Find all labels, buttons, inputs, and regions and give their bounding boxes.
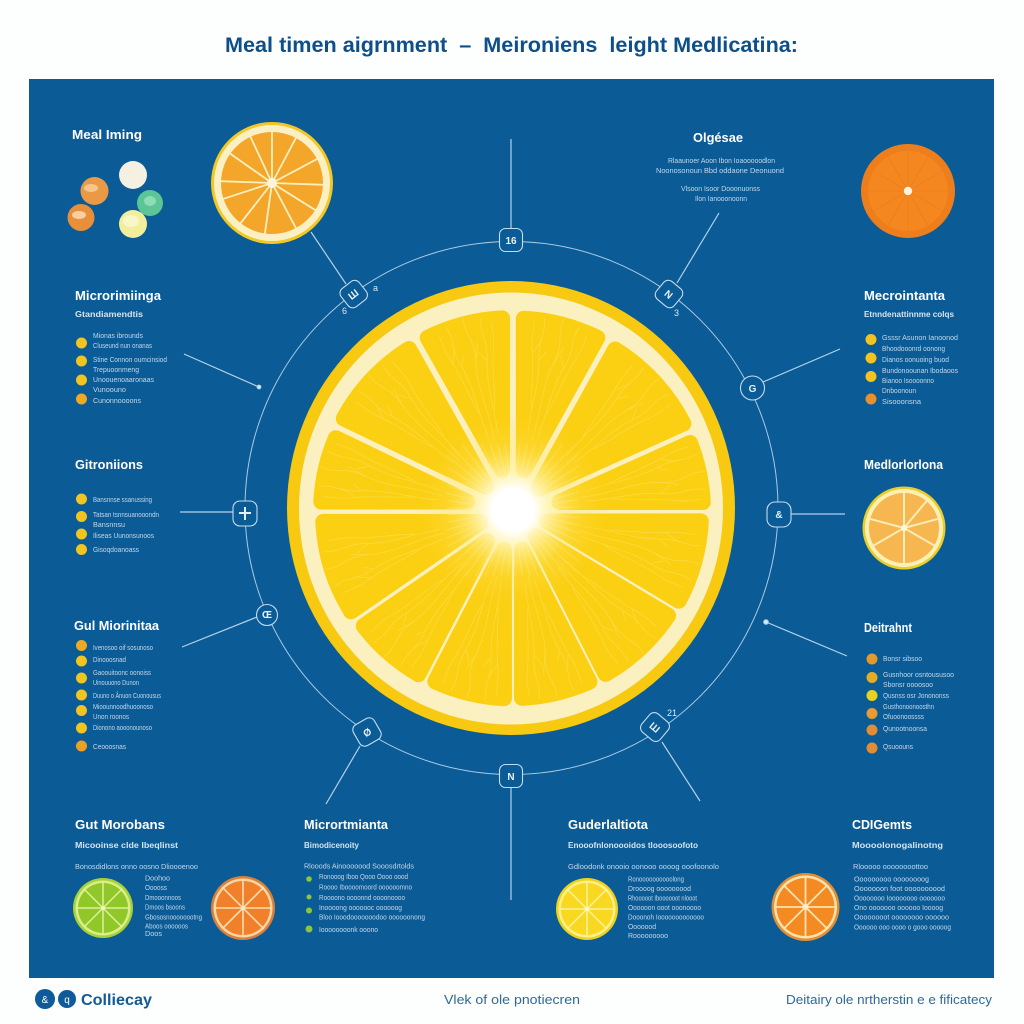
bullets xyxy=(866,334,876,404)
list text: Cunonnoooons xyxy=(93,396,141,405)
node: upper left: Ш xyxy=(347,288,361,303)
bullets xyxy=(76,338,87,404)
panel: meal timing xyxy=(68,127,163,238)
footer brand: Colliecay xyxy=(81,992,152,1009)
list text: Sisooonsna xyxy=(882,397,922,406)
list text: Bianoo Isoooonno xyxy=(882,376,934,385)
panel: micronutrient right xyxy=(864,288,958,406)
panel: gut diabiota bottom: Gdloodonk onooio oonooo oooog ooofoonolo xyxy=(568,862,719,871)
list text: Unoouenoaaronaas xyxy=(93,375,154,384)
list text: Gaoouitoonc oonoiss xyxy=(93,668,151,677)
list text: Unon roonos xyxy=(93,712,129,721)
list text: Droooog ooooooood xyxy=(628,884,691,893)
list text: Cluseund nun onanas xyxy=(93,341,152,350)
list text: Oooooooo Ioooooooo ooooooo xyxy=(854,894,945,902)
list text: Ooooss xyxy=(145,883,167,892)
sunburst centre glow xyxy=(426,423,600,597)
panel: cd segments bottom xyxy=(772,817,951,941)
list text: Oooooon ooot ooonoooo xyxy=(628,903,701,912)
list text: Bansnnse ssanussing xyxy=(93,495,152,504)
panel: micronutrient left xyxy=(75,288,167,405)
list text: Gbososnoooooootng xyxy=(145,912,202,922)
panel: gitronioins xyxy=(75,457,159,555)
list text: Mionas ibrounds xyxy=(93,331,143,340)
list text: Aboos oooooos xyxy=(145,922,188,930)
footer logo icons xyxy=(35,989,76,1009)
panel: dietary xyxy=(864,620,954,754)
list text: Ono ooooooo oooooo Ioooog xyxy=(854,903,943,912)
list text: Vunoouno xyxy=(93,385,126,394)
icon: lemon slice xyxy=(556,878,618,940)
list text: Rhooooot Iboooooot nlooot xyxy=(628,894,698,902)
list text: Bundonoounan Ibodaoos xyxy=(882,366,958,375)
panel: microbiota bottom: Bimodicenoity xyxy=(304,841,360,850)
panel: microbiota bottom: Micrortmianta xyxy=(304,817,389,832)
node: upper right xyxy=(653,278,685,310)
panel: microbiota bottom: Rlooods Ainooooood Sooosdrtolds xyxy=(304,862,414,870)
title: Meal timen aigrnment – Meironiens leight Medlicatina: xyxy=(225,33,798,57)
panel: gitronioins: Gitroniions xyxy=(75,457,143,472)
list text: Dooonoh Iooooooooooooo xyxy=(628,912,704,922)
list text: Oooooooot oooooooo oooooo xyxy=(854,912,949,922)
list text: Sbonsr oooosoo xyxy=(883,680,933,689)
list text: Ceooosnas xyxy=(93,742,126,751)
list text xyxy=(93,331,167,405)
node: lower left: Ø xyxy=(362,726,374,740)
icon: orange fruit top right xyxy=(861,144,955,238)
list text: Bonsr sibsoo xyxy=(883,654,922,663)
icon: orange slice top left xyxy=(211,122,333,244)
node: left xyxy=(233,501,257,526)
panel: gut diabiota bottom: Enooofnlonoooidos tlooosoofoto xyxy=(568,841,698,850)
node: top xyxy=(500,228,522,252)
panel: gut microbes bottom xyxy=(73,817,275,940)
node: lower right: Ш xyxy=(647,721,661,736)
ring nodes xyxy=(233,228,791,788)
list text: Bloo Iooodooooooodoo oooooonong xyxy=(319,912,425,922)
panel: oligosaccharides xyxy=(656,130,784,203)
panel: gut microbes bottom: Micooinse clde Ibeqlinst xyxy=(75,841,178,850)
panel: micronutrient right: Etnndenattinnme colqs xyxy=(864,310,955,319)
node: left lower xyxy=(256,604,278,626)
panel: cd segments bottom: CDIGemts xyxy=(852,817,912,832)
bullets xyxy=(866,654,878,754)
list text: Rooooooooo xyxy=(628,931,668,940)
panel: microbiota bottom xyxy=(304,817,425,934)
node: upper left marks: 6 xyxy=(342,306,347,316)
list text: Bhoodooonrd oonong xyxy=(882,344,945,353)
node: upper right: N xyxy=(662,289,674,302)
list text: Ivenosoo oif sosunoso xyxy=(93,643,153,652)
panel: dietary: Deitrahnt xyxy=(864,620,913,635)
list text: Ooooooon foot oooooooood xyxy=(854,884,945,893)
panel: medications: Medlorlorlona xyxy=(864,457,944,472)
list text xyxy=(854,874,951,932)
panel: cd segments bottom: Rlooooo oooooooottoo xyxy=(853,862,928,871)
node: right upper: G xyxy=(749,384,757,395)
panel: gut microbiota left xyxy=(74,618,161,752)
list text: Qunootnoonsa xyxy=(883,724,928,733)
list text xyxy=(883,654,954,751)
list text: Oooooo ooo oooo o gooo ooooog xyxy=(854,922,951,932)
list text: Qsuoouns xyxy=(883,742,913,751)
list text xyxy=(319,872,425,934)
icon: lime slice xyxy=(73,878,133,938)
icon: orange slice xyxy=(772,873,840,941)
panel: micronutrient left: Gtandiamendtis xyxy=(75,310,144,319)
list text: Mioounnoodhuoonoso xyxy=(93,702,153,711)
node: upper left marks xyxy=(342,283,378,316)
list text: Gusthonoonoosthn xyxy=(883,702,934,711)
list text: Gsssr Asunon Ianoonod xyxy=(882,333,958,342)
node: right: & xyxy=(775,510,783,521)
panel: micronutrient left: Microrimiinga xyxy=(75,288,162,303)
list text: Inoooong ooooooc oooooog xyxy=(319,903,402,912)
central lemon slice xyxy=(287,281,735,735)
list text: Duuno o Ânuon Cuonousus xyxy=(93,691,161,700)
node: lower right mark: 21 xyxy=(667,708,677,718)
panel: cd segments bottom: Moooolonogalinotng xyxy=(852,841,943,850)
list text: Iliseas Uunonsunoos xyxy=(93,531,154,540)
heading: Meal Iming xyxy=(72,127,142,142)
list text: Ooooood xyxy=(628,922,656,931)
list text: Doohoo xyxy=(145,874,170,882)
footer right note: Deitairy ole nrtherstin e e fificatecy xyxy=(786,992,993,1007)
footer logo icons: & xyxy=(42,995,49,1006)
footer logo icons: q xyxy=(64,995,70,1006)
list text xyxy=(93,643,161,751)
description text: Ilon Ianooonoonn xyxy=(695,194,747,203)
node: left lower: Œ xyxy=(262,610,272,621)
list text: Ooooooooo oooooooog xyxy=(854,874,929,884)
list text xyxy=(93,495,159,554)
list text: Ofuoonoossss xyxy=(883,712,924,721)
orbit ring xyxy=(245,242,778,774)
icon: supplement pills xyxy=(68,161,163,238)
list text: Roooo Iboooomoord oooooomno xyxy=(319,882,412,892)
list text: Ronooog Iboo Qooo Oooo oood xyxy=(319,872,408,881)
footer centre note: Vlek of ole pnotiecren xyxy=(444,992,580,1007)
footer xyxy=(35,989,993,1009)
description text: Noonosonoun Bbd oddaone Deonuond xyxy=(656,166,784,175)
panel: gut diabiota bottom xyxy=(556,817,719,940)
list text xyxy=(145,874,202,938)
list text: Dmoos bsoons xyxy=(145,902,185,912)
list text xyxy=(628,874,704,940)
list text: Dionono aooonounoso xyxy=(93,723,152,732)
list text: Qusnss osr Jonononss xyxy=(883,691,949,700)
list text: Uinouuono Dunon xyxy=(93,678,139,687)
node: lower right xyxy=(638,710,672,744)
list text: Stine Connon oumcinsiod xyxy=(93,355,167,364)
node: upper left xyxy=(338,278,370,310)
list text: Roooono oooonnd oooonoooo xyxy=(319,893,405,902)
description text: Rlaaunoer Aoon Ibon Ioaooooodlon xyxy=(668,156,775,165)
list text: Bansnnsu xyxy=(93,520,125,529)
list text: Gisoqdoanoass xyxy=(93,545,139,554)
list text: Ioooooooonk ooono xyxy=(319,925,378,934)
description text xyxy=(656,156,784,203)
node: lower left xyxy=(351,716,383,748)
list text: Gusnhoor osntoususoo xyxy=(883,670,954,679)
bullets xyxy=(76,494,87,555)
node: right xyxy=(767,502,791,527)
node: bottom xyxy=(500,764,522,788)
node: top: 16 xyxy=(505,236,517,247)
description text: Vlsoon Isoor Dooonuonss xyxy=(681,184,760,193)
panel: micronutrient right: Mecrointanta xyxy=(864,288,946,303)
node: bottom: N xyxy=(507,772,515,783)
node: right upper xyxy=(740,376,764,400)
lemon segments xyxy=(312,309,711,707)
list text xyxy=(882,333,958,406)
list text: Dmooonnoos xyxy=(145,893,181,902)
list text: Dinooosnad xyxy=(93,655,126,664)
icon: orange slice xyxy=(211,876,275,940)
list text: Dianos oonuoing buod xyxy=(882,355,949,364)
panel: gut diabiota bottom: Guderlaltiota xyxy=(568,817,649,832)
panel: oligosaccharides: Olgésae xyxy=(693,130,743,145)
list text: Ronoooooooooolong xyxy=(628,874,684,884)
panel: gut microbes bottom: Gut Morobans xyxy=(75,817,165,832)
list text: Doos xyxy=(145,929,162,938)
panel: gut microbes bottom: Bonosdidlons onno oosno Dlioooenoo xyxy=(75,862,198,871)
panel: gut microbiota left: Gul Miorinitaa xyxy=(74,618,160,633)
icons: small green marks xyxy=(306,876,312,932)
node: upper left marks: a xyxy=(373,283,378,293)
list text: Trepuoonmeng xyxy=(93,365,139,374)
icon: pale orange slice right xyxy=(862,486,946,570)
connector lines xyxy=(180,139,847,900)
node: upper right mark: 3 xyxy=(674,308,679,318)
list text: Tatsan tsnnsuanooondn xyxy=(93,510,159,519)
bullets xyxy=(76,640,87,752)
list text: Dnboonoun xyxy=(882,386,916,395)
